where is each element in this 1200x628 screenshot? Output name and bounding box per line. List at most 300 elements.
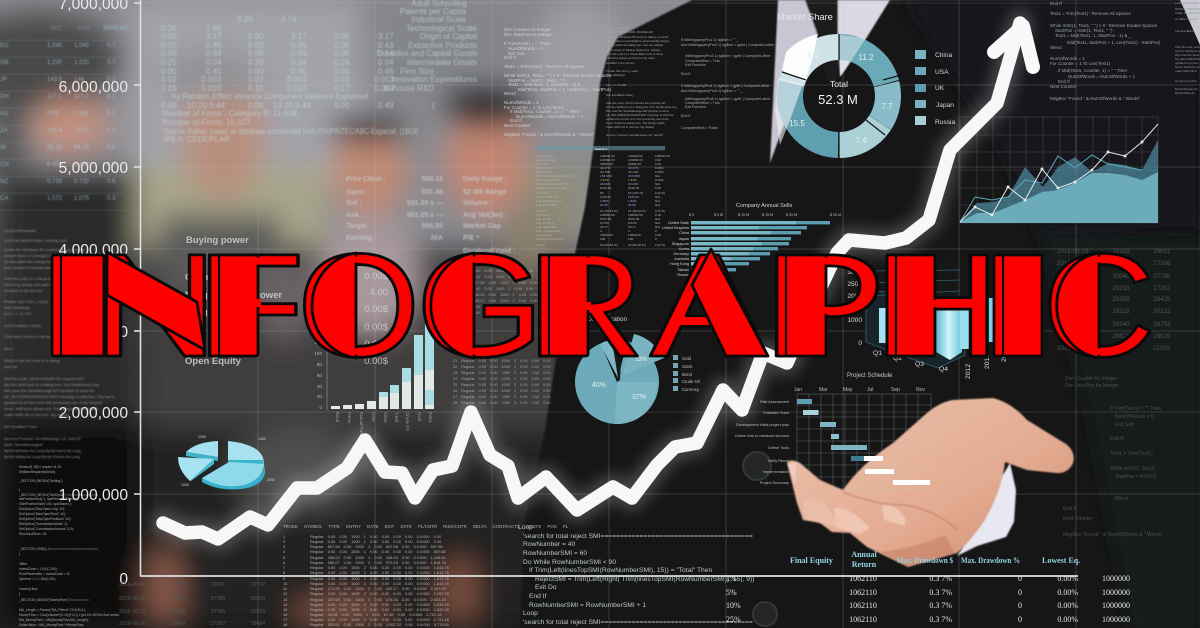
top statistics table: 0.26 [248,58,264,67]
performance summary table: 0 (0 %) [655,191,665,195]
top statistics table: Industrial Scale [411,15,467,24]
left data table: 0.718 [47,179,63,185]
stock quote table: Target [346,223,368,230]
trades table upper rows: 0.00 0.00 1000 2 0.00 0.00 0.00 0.00 [473,305,556,309]
right side code: NumOfWords = NumOfWords + 1 [1068,74,1136,79]
left data table: 143.5 [47,77,63,83]
performance summary table: 0.00% [655,166,664,170]
bottom-left script code: SetOption("CommissionAmount",0.2); [19,527,74,531]
component code block: Exit Function [685,63,706,67]
3d quarterly bar chart: 1500 [847,305,862,312]
top statistics table: 0.00 [248,67,264,76]
loop code block: Exit Do [535,584,557,591]
trades table upper rows: 28 Regular 0.00 0.00 1000 2 0.00 0.00 0.00 [453,401,550,405]
dim right lower code [1063,376,1164,538]
bottom-left script code: Uptrend = C > MA(C,50); [19,577,56,581]
left data table: EU [0,43,8,49]
final equity results table: 1062110 [849,574,877,583]
bar chart lower centre: Gold [417,412,422,422]
far right notes: make width fits in [1175,69,1198,73]
performance summary table: 0.00 [655,233,661,237]
performance summary table: 0 (0 %) [655,243,665,247]
top statistics table: 0.003 [201,75,222,84]
performance summary table: 0 [655,237,657,241]
left code notes: VBA long strings and add a long value as [4,282,75,287]
portfolio pie chart: 37% [632,394,646,401]
component code block: And IIdbImgqueryPro2 1( sgilism = gyiet ) ComputerLather [681,43,775,47]
VBA word count code: End If [504,55,517,60]
VBA word count code: While InStr(1, Text1, " ") > 0 ' Remove Double Spaces [504,73,612,78]
top statistics table: 0.02 [161,75,177,84]
small dense text column: than content in Display dialog box. Setting [606,48,660,52]
performance summary table: Total Capital [536,154,553,158]
left data table: 1.045 [47,43,63,49]
performance summary table: Total Profit [536,213,551,217]
dim right data table: 2016-09-09 29352 27396 [1057,260,1171,267]
top statistics table: 0.49 [378,101,394,110]
final equity results table [726,550,1130,624]
y axis with labels: 3,000,000 [59,324,128,341]
VBA word count code: NumOfWords = NumOfWords + 1 [516,114,584,119]
performance summary table: Avg. Profit/Loss [536,195,558,199]
title: INFOGRAPHIC: A [650,224,768,388]
performance summary table: N/A [655,203,661,207]
left data table: CH [0,94,9,100]
left code notes: than content in Display dialog box [4,265,62,270]
performance summary table: # bars in largest win [536,237,564,241]
performance summary table: N/A [655,217,661,221]
performance summary table: 49.37% [600,166,611,170]
bottom trades table: 1 [283,534,285,539]
3d quarterly bar chart: Q4 [939,366,948,373]
left code notes: Add this code, which includes the required API [4,376,84,381]
loop code block: 'search for total reject SMI======================================= [523,533,753,540]
dim right lower code: While InStr(1, Text1) [1110,466,1156,472]
3d pie chart: 2000 [267,478,275,482]
bottom trades table: Regular 0.00 0.00 1000 2 0.00 0.00 0.00 0.00 0.0:000 1,815.76 [310,570,449,575]
top statistics table: 0.00 [248,49,264,58]
left code notes: doesn't have a Comdlg32 to automatically [4,253,76,258]
left code notes: items. SetFocus allows key. The string's width in pixels [4,406,98,411]
performance summary table: N/A [655,225,661,229]
performance summary table: 8120.00 [600,186,611,190]
bar chart lower centre: Crude Oil [405,412,410,431]
bar chart lower centre: Corn [371,412,376,422]
VBA word count code: Mid(Text1, StartPos + 1, Len(Text1) - StartPos) [518,87,612,92]
dim right lower code: MsgBox "Found " & NumOfWords & " Words" [1063,532,1164,538]
bottom trades table: Regular 0.00 0.00 1000 1 0.00 0.00 0.00 0.00 0.0:000 807.58 [310,549,446,554]
VBA word count code: Next Counter [504,123,531,128]
stock quote table: Avg Vol(3m) : [463,212,507,219]
top statistics table: 0.00 [161,49,177,58]
performance summary table: Winners [536,209,548,213]
loop code block: Loop [523,610,538,617]
top statistics table: 0.45 [206,41,222,50]
final equity results table: 10% [726,601,741,610]
top statistics table: ( [432,101,435,110]
VBA word count code: Dim StartPos As Integer [504,32,553,37]
performance summary table: Avg. Profit % [536,221,554,225]
top statistics table: Number of Firms - Category B: 11,638 [162,109,298,118]
3d quarterly bar chart: 1000 [847,317,862,324]
market share donut chart: USA [935,69,949,76]
left data table: JP [0,77,7,83]
left data table: 117.2 [74,94,89,100]
left code notes: API Modifiers Then [4,424,37,429]
performance summary table: 39.77 [628,225,636,229]
3d pie chart: 1400 [258,437,266,441]
top statistics table: 3.17 [206,32,222,41]
y axis with labels: 4,000,000 [59,242,128,259]
small dense text column: Sub EmulBars Click() [606,93,634,97]
project schedule gantt chart: Development initial project plan [736,423,789,427]
right side code: Wend [1050,45,1062,50]
stock quote table: Market Cap [463,223,501,230]
top statistics table: 0.04 [291,58,307,67]
stock quote table: Prev Close : [346,176,386,183]
left data table: NZ [0,179,8,185]
loop code block [518,524,754,626]
final equity results table: 0.3 7% [929,615,952,624]
left code notes: Next I [4,346,14,351]
component code block: End If [681,114,690,118]
VBA word count code: StartPos = InStr(1, Text1, " ") [508,78,566,83]
project schedule gantt chart: Define Tools [768,446,789,450]
small dense text column: Private Sub Form_Load() [606,69,638,73]
performance summary table: 5074.29 [628,217,639,221]
company annual sells bar chart: Company Annual Sells [736,203,792,209]
far right notes: Sub EmulBars [1175,29,1194,33]
dim right lower code: Text1 = Trim(Text1) [1110,451,1153,457]
small dense text column: For i = 1 To 100 [606,83,627,87]
left data table: 0.1 [107,94,116,100]
far right notes: Unlike the Windows [1175,11,1200,15]
bottom trades table: Regular 438.03 0.00 1000 1 0.00 438.03 0.00 0.0:000 1,245.61 [310,555,446,560]
top statistics table: ;IPEA; CEDEPLAR [162,135,230,144]
hand and cuff [787,398,1074,567]
component code block: And IIdbImgqueryPro5 1( sgilism = "" _ [681,89,744,93]
performance summary table: 24.95 [628,203,636,207]
far right notes [1175,1,1200,95]
trades table upper rows: 26 Regular 0.00 0.00 1000 2 0.00 0.00 0.00 [453,389,550,393]
top statistics table: 0.45 [206,67,222,76]
title: INFOGRAPHIC: N [92,224,219,388]
performance summary table: 100 [600,237,605,241]
bottom trades table: Regular 43.95 0.00 1000 2 0.00 87.89 0.00 0.0:000 2,721.18 [310,612,442,617]
performance summary table: Avg. Bars Held [536,225,557,229]
performance summary table: N/A [655,221,661,225]
final equity results table: 0.00% [1057,574,1078,583]
stock quote table: P/E * [463,235,479,242]
3d quarterly bar chart: Q3 [915,361,924,368]
left data table: IN [0,145,6,151]
final equity results table: 1062110 [849,615,877,624]
title: INFOGRAPHIC [52,223,1156,388]
performance summary table: 39.77 [600,225,608,229]
trades table upper rows [453,269,561,405]
top statistics table: 0.00 [334,32,350,41]
bottom trades table: Regular 0.00 0.00 1000 2 0.00 0.00 0.00 0.00 0.0:000 2,157.93 [310,591,449,596]
performance summary table: 24.95 [600,203,608,207]
stock quote table: Dividend/Yield : [463,248,515,255]
bottom trades table: 12 [283,591,287,596]
bottom trades table: 3 [283,544,285,549]
final equity results table: Final Equity [790,556,833,565]
bottom trades table: 7 [283,565,285,570]
bottom-left script code [18,465,119,627]
company annual sells bar chart: Russia [677,273,690,277]
buying power panel: 4.00 [370,287,388,298]
company annual sells bar chart: Taiwan [677,268,689,272]
dim bottom date table: 2016-08-23 30400 27785 30029 [119,609,265,615]
buying power panel: 0.00$ [364,304,389,315]
small dense text column: Add this code to a Visual Basic form to show [606,52,664,56]
top statistics table: ;Source: Author, based on database constructed from PIA/PINTEC/ABC-Espacial, (1BGE [162,127,419,136]
right side code: Text1 = Mid(Text1, 1, StartPos - 1) & _ [1055,33,1132,38]
left data table: 0.851 [74,111,90,117]
title: INFOGRAPHIC: I [60,224,101,388]
top statistics table [161,0,478,144]
project schedule gantt chart: Define how to measure success [735,434,789,438]
top statistics table: Durables and Capital Goods [376,49,477,58]
top statistics table: 0.64 [206,49,222,58]
portfolio pie chart [572,316,700,424]
left data table: 0.3 [107,196,116,202]
performance summary table: Losers [536,243,546,247]
bottom trades table: 16 [283,612,287,617]
title: INFOGRAPHIC: G [416,224,545,388]
top statistics table: 0.00 [161,67,177,76]
performance summary table: 106560.00 [628,213,643,217]
far right notes: Win uses the Send [1175,53,1200,57]
project schedule gantt chart: Establish Team [763,411,789,415]
left code notes: Alias "SendMessageA" [4,442,44,447]
left code notes: For i = 1 To 100 [4,311,32,316]
bottom trades table: 11 [283,586,287,591]
bottom trades table: 8 [283,570,285,575]
left code notes: updated to an item from the previously use of the longest [4,400,103,405]
top statistics table: 0.003 [374,84,395,93]
small dense text column [606,26,677,137]
company annual sells bar chart: $ 30 M [830,213,841,217]
market share donut chart: 7.4 [855,136,867,145]
VBA word count code [504,27,612,137]
top statistics table: 10.20 0.44 [273,101,311,110]
left data table: 0.7 [107,43,116,49]
bottom-left script code: RoundLotSize= 10; [19,532,47,536]
company annual sells bar chart: $ 5 M [714,213,723,217]
small dense text column: Add this code, which includes the required API [606,101,666,105]
company annual sells bar chart: Singapore [672,242,689,246]
performance summary table: 23.24% [600,182,611,186]
small dense text column: Hot Key Function SendMessage Lib "user32" [606,133,664,137]
left code notes: do this within the dialog box. You can display [4,259,81,264]
stock quote table: 506.50 [422,223,443,230]
market share donut chart: Market Share [777,12,833,22]
area and line chart top right [960,117,1158,223]
top statistics table: 0.00 [334,49,350,58]
bottom-left script code: _SECTION_BEGIN("MoneyFlow") //========= [18,598,89,602]
bottom trades table: Regular 807.58 0.00 1000 1 0.00 807.58 0.00 0.0:000 807.58 [310,544,443,549]
performance summary table: 5074.29 [600,217,611,221]
bottom-left script code: { [19,592,21,596]
bottom trades table: Regular 0.00 0.00 1000 1 0.00 0.00 0.00 0.00 0.0:000 0.00 [310,534,442,539]
market share donut chart: 7.7 [881,102,893,111]
project schedule gantt chart: Jul [867,387,873,393]
left code notes: make width fits in this box. dlg display [4,412,69,417]
dim right data table: 2016-08-05 29240 28753 [1057,321,1171,328]
small dense text column: Win uses the SendMessage API function to send [606,109,669,113]
title: INFOGRAPHIC: I [1000,224,1041,388]
performance summary table: 1.82% [628,199,637,203]
final equity results table: 1% [726,574,737,583]
bottom trades table: 13 [283,597,287,602]
top statistics table: Intermediate Goods [407,58,477,67]
performance summary table: Net Profit [536,162,549,166]
final equity results table: Max. Drawdown $ [897,556,953,565]
stock quote table: Volume : [463,200,492,207]
bottom-left script code: SetOption("MaxOpenLong",10); [19,507,65,511]
right side code: For Counter = 1 To Len(Text1) [1050,61,1111,66]
top statistics table: 0.003 [287,84,308,93]
dim right data table: 2016-08-12 29228 30222 [1057,308,1171,315]
dim right lower code: Next Counter [1063,516,1093,522]
bottom trades table: Regular 171.09 0.00 1000 2 0.00 342.17 0.00 0.0:000 2,157.93 [310,586,446,591]
performance summary table: 1120.00 [628,195,639,199]
top statistics table: 0.45 [291,41,307,50]
bottom-left script code: SetOption("CommissionMode",1); [19,522,68,526]
component code block: If IIdbImgqueryPro1 1( sgilism = "" _ [681,38,739,42]
left data table: 6.451 [47,162,63,168]
title: INFOGRAPHIC: P [761,223,887,387]
top statistics table: 3.17 [291,32,307,41]
bottom-left script code: PriceReversible = InvestClose > 5; [19,572,70,576]
left code notes: 'Sets Bars of lines in the list box [4,334,59,339]
stock quote table: Ask : [346,212,363,219]
bottom trades table: Regular 237.68 0.00 1000 2 0.00 475.36 0.00 0.0:000 2,633.29 [310,597,446,602]
suit silhouette [520,0,1200,628]
top statistics table: 0.00 [161,101,177,110]
final equity results table: 0 [1018,588,1022,597]
loop code block: RowNumber = 40 [523,541,576,548]
project schedule gantt chart [735,373,931,489]
company annual sells bar chart: United Kingdom [662,226,689,230]
bottom trades table: 17 [283,617,287,622]
performance summary table: 19020.00 [628,233,641,237]
buying power panel: 0.00$ [364,322,389,333]
bottom trades table: Regular 0.00 0.00 1000 2 0.00 0.00 0.00 0.00 0.0:000 2,633.29 [310,607,449,612]
trades table upper rows: 438.03 0.00 1000 1 0.00 0.00 0.00 0.00 [473,293,561,297]
component code block [681,38,775,130]
trades table upper rows: 24 Regular 0.00 0.00 1000 2 0.00 0.00 0.00 [453,377,550,381]
dim bottom date table: 2016-09-06 30328 29651 29702 [119,582,265,588]
3d quarterly bar chart: 2013 [984,354,991,369]
left data table: AU [0,111,8,117]
top statistics table: Firm Size [400,67,435,76]
performance summary table: 149368.33 [628,158,643,162]
performance summary table: Largest win [536,233,552,237]
bar chart lower centre: 20 [317,394,322,399]
title: INFOGRAPHIC: F [195,223,305,387]
dim right data table: 2016-08-26 29293 27287 [1057,285,1171,292]
trades table upper rows: 25 Regular 0.00 0.00 1000 2 0.00 0.00 0.00 [453,383,550,387]
buying power panel: 0.00$ [364,271,389,282]
left data table: 1.220 [47,60,63,66]
top statistics table: 0.00 [334,101,350,110]
component code block: ComputerWins = True [685,101,720,105]
VBA word count code: Text1 = Mid(Text1, 1, StartPos - 1) & _ [508,82,585,87]
bar chart lower centre: Forex [347,412,352,424]
top statistics table: 0.00 [334,67,350,76]
small dense text column: DISPLAY ADDITIONAL SIGNALLED [606,30,653,34]
top statistics table: 10.20 0.44 [187,101,225,110]
left data table: 1.045 [74,43,90,49]
shirt and tie [770,0,890,163]
right side code: End If [1058,79,1071,84]
loop code block: RowNumberSMI = RowNumberSMI + 1 [529,602,646,609]
performance summary table: 153.60% [628,174,640,178]
performance summary table: Avg. Profit/Loss % [536,199,561,203]
bottom-left script code: DollarValue = MA_MoneyFlow * MoneyFlow; [19,623,84,627]
project schedule gantt chart: May [843,387,853,393]
trades table upper rows: 0.00 0.00 1000 2 0.00 0.00 0.00 0.00 [473,311,556,315]
title: INFOGRAPHIC: O [297,224,420,388]
top statistics table: 0.003 [374,75,395,84]
performance summary table: 49368.33 [628,162,641,166]
y axis with labels: 5,000,000 [59,160,128,177]
performance summary table: 100000.00 [655,154,670,158]
far right notes: ByVal wMsg As [1175,91,1195,95]
bottom trades table [283,524,569,627]
company annual sells bar chart: Germany [673,252,689,256]
top statistics table: 0.003 [201,84,222,93]
performance summary table: Net Risk Adjusted Return % [536,174,574,178]
top statistics table: 0.00 [161,41,177,50]
dim right data table [1057,248,1171,352]
left code notes: With lstDialogs [4,305,30,310]
performance summary table: 7.47% [600,178,609,182]
market share donut chart: Russia [935,119,955,126]
bar chart lower centre [314,320,434,437]
performance summary table: 19020.00 [600,233,613,237]
left data table: 0.6 [107,145,116,151]
left code notes: Unlike the Windows 95 common dialog box, no [4,247,85,252]
left data table: 0.1 [107,111,116,117]
top statistics table: Origin of Capital [420,32,477,41]
company annual sells bar chart: Hong Kong [670,262,689,266]
right side code: If Mid(Text1, Counter, 1) = " " Then [1058,68,1128,73]
project schedule gantt chart: Jan [794,387,802,393]
top statistics table: 4.74 [281,15,297,24]
company annual sells bar chart [662,203,841,277]
top statistics table: 0.20 [237,15,253,24]
bottom-left script code: setPositionSize( 1, spsPercentOfEquity ); [19,497,79,501]
right side code: End If [1050,1,1063,6]
top statistics table: 0.02 [334,75,350,84]
3d quarterly bar chart: 2000 [847,293,862,300]
market share donut chart: 15.5 [789,119,805,128]
buying power panel: Margin [185,307,216,318]
bar chart lower centre: Index [428,412,433,424]
performance summary table: N/A [655,199,661,203]
project schedule gantt chart: Risk Assessment [760,400,790,404]
buying power panel: Margin Buying Power [185,290,282,301]
bottom trades table: 15 [283,607,287,612]
performance summary table: N/A [655,195,661,199]
performance summary table: 106560.00 [600,213,615,217]
component code block: Exit Function [685,105,706,109]
loop code block: Do While RowNumberSMI < 90 [523,559,616,566]
